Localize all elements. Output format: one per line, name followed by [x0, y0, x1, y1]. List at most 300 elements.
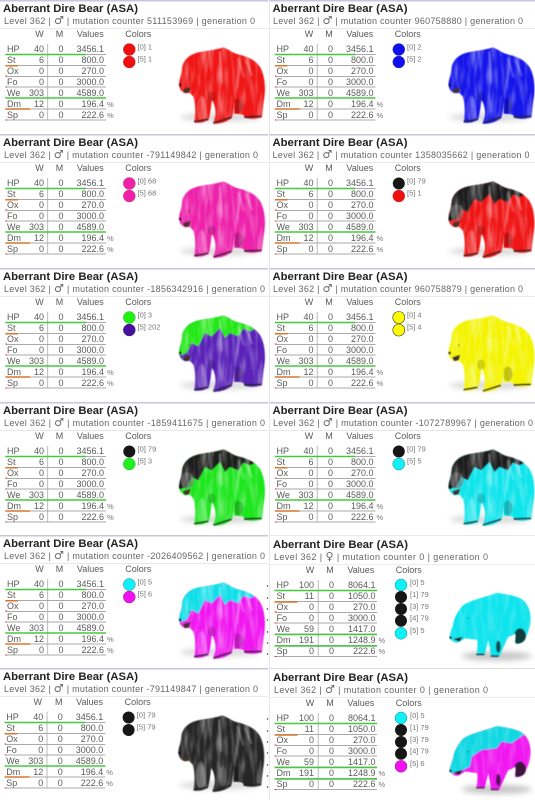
- stats table: M: [325, 29, 333, 39]
- stats table: We: [276, 757, 290, 767]
- stats table: W: [305, 297, 314, 307]
- stats table: %: [106, 779, 113, 788]
- stats table: 270.0: [351, 200, 374, 210]
- stats table: 191: [299, 768, 314, 778]
- icon: red bear: [170, 40, 270, 127]
- stats table: We: [276, 490, 290, 500]
- stats table: 800.0: [81, 590, 104, 600]
- colour swatches: [3] 79: [410, 602, 429, 611]
- stats table: Sp: [7, 110, 18, 120]
- stats table: 3456.1: [346, 44, 374, 54]
- stats table: 196.4: [81, 233, 104, 243]
- title: Aberrant Dire Bear (ASA): [3, 538, 138, 550]
- stats table: 0: [39, 345, 44, 355]
- stats table: Colors: [395, 431, 421, 441]
- stats table: M: [325, 163, 333, 173]
- stats table: 0: [328, 178, 333, 188]
- icon: green and purple bear: [178, 314, 266, 393]
- stats table: 0: [58, 579, 64, 589]
- stats table: 4589.0: [76, 756, 103, 766]
- stats table: 0: [39, 334, 44, 344]
- colour swatches: [5] 202: [138, 322, 160, 332]
- stats table: 0: [328, 323, 333, 333]
- colour swatches: [395, 578, 429, 639]
- icon: cyan small bear: [440, 587, 535, 661]
- stats table: 12: [34, 233, 44, 243]
- stats table: 6: [308, 55, 314, 65]
- stats table: Colors: [395, 163, 421, 173]
- subtitle: Level 362 | ♂ | mutation counter -1859411675 | generation 0: [4, 416, 265, 429]
- stats table: 0: [58, 312, 64, 322]
- stats table: 8064.1: [348, 580, 376, 590]
- stats table: 303: [29, 222, 44, 232]
- stats table: 0: [329, 746, 334, 756]
- stats table: 303: [298, 356, 314, 366]
- stats table: 0: [58, 745, 63, 755]
- stats table: M: [326, 565, 334, 575]
- panel: black bear: [0, 668, 269, 795]
- stats table: 3456.1: [76, 446, 104, 456]
- subtitle: Level 362 | ♀ | mutation counter 0 | generation 0: [274, 550, 488, 563]
- stats table: HP: [276, 713, 289, 723]
- stats table: 0: [39, 110, 44, 120]
- stats table: 3456.1: [346, 312, 374, 322]
- stats table: 800.0: [81, 323, 104, 333]
- stats table: 0: [58, 323, 64, 333]
- stats table: St: [6, 723, 15, 733]
- subtitle: Level 362 | ♂ | mutation counter -1072789967 | generation 0: [273, 416, 533, 429]
- icon: black and cyan bear: [448, 448, 535, 527]
- stats table: 196.4: [351, 99, 374, 109]
- stats table: 0: [328, 244, 333, 254]
- stats table: 222.6: [81, 645, 104, 655]
- stats table: %: [107, 379, 114, 388]
- stats table: 222.6: [81, 512, 104, 522]
- subtitle: Level 362 | ♂ | mutation counter 960758879 | generation 0: [273, 282, 523, 295]
- stats table: 3456.1: [76, 712, 103, 722]
- stats table: 0: [328, 378, 333, 388]
- stats table: 4589.0: [76, 88, 104, 98]
- panel: pink bear: [0, 134, 270, 261]
- stats table: 303: [29, 490, 44, 500]
- stats table: 0: [58, 356, 64, 366]
- stats table: 0: [309, 735, 314, 745]
- stats table: 0: [328, 334, 333, 344]
- stats table: 4589.0: [76, 623, 104, 633]
- stats table: [5, 163, 152, 254]
- stats table: 1248.9: [348, 635, 376, 645]
- stats table: 0: [58, 244, 64, 254]
- panel: blue bear: [270, 0, 535, 127]
- stats table: M: [326, 698, 334, 708]
- stats table: 40: [33, 712, 43, 722]
- colour swatches: [0] 5: [410, 578, 425, 587]
- stats table: 0: [58, 446, 64, 456]
- stats table: 40: [303, 178, 314, 188]
- stats table: 0: [58, 66, 64, 76]
- panel: yellow bear: [270, 268, 535, 395]
- stats table: 3000.0: [76, 77, 104, 87]
- stats table: 0: [328, 457, 333, 467]
- stats table: Ox: [276, 602, 289, 612]
- panel: green and purple bear: [0, 268, 270, 395]
- subtitle: Level 362 | ♂ | mutation counter 0 | generation 0: [274, 683, 488, 696]
- stats table: Sp: [7, 244, 18, 254]
- stats table: HP: [7, 579, 20, 589]
- stats table: %: [376, 513, 384, 522]
- stats table: Dm: [276, 233, 290, 243]
- colour swatches: [5] 1: [138, 54, 152, 64]
- colour swatches: [5] 6: [410, 759, 425, 768]
- stats table: Dm: [7, 501, 21, 511]
- stats table: 0: [329, 768, 334, 778]
- stats table: 3456.1: [76, 312, 104, 322]
- colour swatches: [0] 79: [407, 444, 426, 454]
- stats table: 222.6: [351, 378, 374, 388]
- stats table: 40: [34, 579, 44, 589]
- stats table: 0: [39, 645, 44, 655]
- stats table: Ox: [7, 200, 19, 210]
- stats table: 222.6: [81, 244, 104, 254]
- colour swatches: [3] 79: [410, 735, 429, 744]
- stats table: [268, 565, 422, 656]
- stats table: 196.4: [81, 634, 104, 644]
- stats table: Dm: [7, 634, 21, 644]
- stats table: 270.0: [81, 734, 103, 744]
- stats table: 303: [29, 356, 44, 366]
- title: Aberrant Dire Bear (ASA): [272, 271, 408, 283]
- stats table: 0: [308, 211, 314, 221]
- colour swatches: [1] 79: [410, 723, 429, 732]
- stats table: 0: [328, 479, 333, 489]
- panel: red bear: [0, 0, 270, 127]
- stats table: 3000.0: [76, 211, 104, 221]
- stats table: Fo: [6, 745, 17, 755]
- stats table: %: [107, 234, 114, 243]
- stats table: W: [306, 698, 315, 708]
- stats table: 0: [328, 490, 333, 500]
- stats table: M: [56, 29, 63, 39]
- stats table: 0: [328, 110, 333, 120]
- icon: black and green bear: [178, 448, 266, 527]
- stats table: Fo: [276, 211, 287, 221]
- stats table: 0: [58, 590, 64, 600]
- stats table: Fo: [7, 612, 18, 622]
- stats table: 4589.0: [346, 88, 374, 98]
- stats table: Sp: [6, 778, 17, 788]
- stats table: 196.4: [81, 367, 104, 377]
- stats table: 800.0: [351, 189, 374, 199]
- stats table: 3456.1: [76, 579, 104, 589]
- stats table: 303: [29, 88, 44, 98]
- stats table: [5, 29, 152, 120]
- stats table: 196.4: [351, 367, 374, 377]
- stats table: We: [276, 356, 290, 366]
- stats table: Ox: [6, 734, 18, 744]
- stats table: 6: [39, 590, 44, 600]
- stats table: 0: [329, 735, 334, 745]
- stats table: 3456.1: [346, 178, 374, 188]
- stats table: 0: [58, 88, 64, 98]
- stats table: HP: [276, 178, 289, 188]
- stats table: St: [276, 189, 286, 199]
- stats table: 0: [309, 646, 314, 656]
- stats table: 0: [309, 602, 314, 612]
- stats table: 0: [328, 356, 333, 366]
- colour swatches: [393, 42, 422, 68]
- stats table: 0: [58, 44, 64, 54]
- stats table: 270.0: [81, 468, 104, 478]
- stats table: HP: [276, 44, 289, 54]
- stats table: 222.6: [81, 778, 103, 788]
- colour swatches: [0] 68: [138, 176, 156, 186]
- stats table: 3000.0: [346, 211, 374, 221]
- stats table: 196.4: [81, 501, 104, 511]
- stats table: W: [35, 564, 44, 574]
- stats table: 0: [39, 479, 44, 489]
- colour swatches: [0] 79: [137, 710, 156, 720]
- stats table: %: [378, 780, 386, 789]
- stats table: M: [325, 297, 333, 307]
- stats table: 0: [329, 613, 334, 623]
- colour swatches: [5] 5: [407, 456, 422, 466]
- stats table: 0: [58, 233, 64, 243]
- stats table: Ox: [276, 66, 289, 76]
- stats table: 12: [34, 367, 44, 377]
- stats table: Dm: [276, 501, 290, 511]
- stats table: 303: [29, 623, 44, 633]
- stats table: 3000.0: [348, 746, 376, 756]
- title: Aberrant Dire Bear (ASA): [3, 405, 138, 417]
- colour swatches: [123, 578, 152, 603]
- stats table: 40: [34, 446, 44, 456]
- colour swatches: [5] 4: [407, 322, 422, 332]
- stats table: 3000.0: [76, 745, 103, 755]
- stats table: M: [56, 163, 63, 173]
- stats table: 0: [58, 634, 64, 644]
- stats table: 3000.0: [346, 77, 374, 87]
- stats table: 800.0: [81, 723, 103, 733]
- stats table: 11: [305, 591, 314, 601]
- stats table: Ox: [7, 66, 19, 76]
- colour swatches: [0] 79: [138, 444, 156, 454]
- stats table: 6: [39, 457, 44, 467]
- stats table: 800.0: [81, 55, 104, 65]
- stats table: 0: [39, 378, 44, 388]
- stats table: 270.0: [81, 334, 104, 344]
- stats table: 800.0: [81, 189, 104, 199]
- stats table: St: [7, 590, 16, 600]
- stats table: Fo: [276, 479, 287, 489]
- colour swatches: [123, 444, 156, 470]
- stats table: 0: [308, 334, 314, 344]
- stats table: Fo: [7, 345, 18, 355]
- stats table: %: [107, 368, 114, 377]
- stats table: W: [35, 431, 44, 441]
- subtitle: Level 362 | ♂ | mutation counter -2026409562 | generation 0: [4, 549, 265, 562]
- colour swatches: [1] 79: [410, 590, 429, 599]
- stats table: 0: [308, 244, 314, 254]
- stats table: Colors: [396, 698, 422, 708]
- stats table: Fo: [276, 345, 287, 355]
- stats table: Values: [346, 29, 374, 39]
- colour swatches: [0] 4: [407, 310, 422, 320]
- stats table: Ox: [276, 334, 289, 344]
- stats table: %: [378, 647, 386, 656]
- colour swatches: [123, 310, 160, 336]
- colour swatches: [5] 6: [138, 590, 152, 598]
- stats table: Colors: [395, 29, 421, 39]
- stats table: HP: [6, 712, 19, 722]
- stats table: 3000.0: [76, 345, 104, 355]
- stats table: Sp: [276, 378, 288, 388]
- stats table: 40: [34, 312, 44, 322]
- stats table: M: [56, 297, 63, 307]
- stats table: HP: [276, 580, 289, 590]
- stats table: 0: [58, 99, 64, 109]
- stats table: 0: [328, 44, 333, 54]
- title: Aberrant Dire Bear (ASA): [273, 672, 408, 684]
- stats table: 0: [328, 55, 333, 65]
- colour swatches: [0] 1: [138, 42, 152, 52]
- colour swatches: [4] 79: [410, 614, 429, 622]
- title: Aberrant Dire Bear (ASA): [273, 539, 408, 551]
- stats table: 0: [329, 635, 334, 645]
- stats table: Dm: [276, 367, 290, 377]
- subtitle: Level 362 | ♂ | mutation counter 511153969 | generation 0: [4, 14, 255, 27]
- stats table: 0: [38, 745, 43, 755]
- stats table: 0: [39, 244, 44, 254]
- colour swatches: [5] 2: [407, 54, 422, 64]
- stats table: 303: [28, 756, 43, 766]
- stats table: 0: [58, 200, 64, 210]
- stats table: 0: [308, 512, 314, 522]
- stats table: 0: [329, 591, 334, 601]
- stats table: Dm: [7, 99, 21, 109]
- stats table: 0: [58, 334, 64, 344]
- colour swatches: [395, 711, 429, 772]
- stats table: 6: [308, 189, 314, 199]
- stats table: 0: [328, 367, 333, 377]
- stats table: We: [276, 222, 290, 232]
- stats table: 0: [328, 512, 333, 522]
- panel: black and green bear: [0, 402, 270, 529]
- stats table: [275, 29, 421, 120]
- stats table: [275, 297, 421, 388]
- stats table: 3456.1: [346, 446, 374, 456]
- stats table: M: [325, 431, 333, 441]
- icon: yellow bear: [440, 308, 535, 395]
- stats table: We: [276, 624, 290, 634]
- stats table: 0: [328, 189, 333, 199]
- colour swatches: [393, 176, 426, 202]
- stats table: 0: [58, 712, 63, 722]
- stats table: 4589.0: [76, 490, 104, 500]
- stats table: %: [376, 379, 384, 388]
- stats table: %: [107, 646, 114, 655]
- stats table: M: [56, 431, 63, 441]
- stats table: %: [107, 513, 114, 522]
- stats table: 0: [328, 345, 333, 355]
- stats table: 59: [304, 624, 314, 634]
- stats table: 0: [329, 624, 334, 634]
- stats table: %: [378, 769, 386, 778]
- stats table: 0: [58, 222, 64, 232]
- stats table: 0: [328, 66, 333, 76]
- stats table: 0: [308, 200, 314, 210]
- stats table: Colors: [125, 697, 151, 707]
- stats table: St: [276, 724, 286, 734]
- stats table: 1050.0: [348, 724, 376, 734]
- stats table: 0: [38, 734, 43, 744]
- stats table: [5, 564, 152, 655]
- stats table: 0: [58, 723, 63, 733]
- stats table: 100: [299, 713, 314, 723]
- stats table: 0: [328, 312, 333, 322]
- stats table: Sp: [7, 512, 18, 522]
- stats table: M: [55, 697, 63, 707]
- stats table: 196.4: [81, 99, 104, 109]
- stats table: 12: [303, 367, 314, 377]
- stats table: 222.6: [81, 378, 104, 388]
- stats table: 4589.0: [346, 222, 374, 232]
- stats table: 0: [308, 345, 314, 355]
- stats table: [275, 163, 421, 254]
- icon: black and red bear: [448, 180, 535, 259]
- stats table: 6: [308, 457, 314, 467]
- stats table: Sp: [276, 646, 288, 656]
- stats table: Values: [346, 297, 374, 307]
- stats table: 100: [299, 580, 314, 590]
- stats table: HP: [7, 446, 20, 456]
- colour swatches: [393, 310, 422, 336]
- stats table: 0: [38, 778, 43, 788]
- stats table: W: [35, 29, 44, 39]
- stats table: %: [107, 635, 114, 644]
- stats table: Fo: [276, 77, 287, 87]
- stats table: 800.0: [351, 55, 374, 65]
- stats table: 1417.0: [348, 624, 376, 634]
- stats table: Colors: [125, 297, 152, 307]
- stats table: 0: [309, 613, 314, 623]
- stats table: 0: [328, 468, 333, 478]
- stats table: %: [107, 111, 114, 120]
- stats table: Values: [347, 698, 375, 708]
- stats table: [5, 431, 152, 522]
- stats table: HP: [276, 312, 289, 322]
- stats table: 1050.0: [348, 591, 376, 601]
- colour swatches: [123, 42, 152, 68]
- stats table: 0: [329, 757, 334, 767]
- stats table: 6: [38, 723, 43, 733]
- stats table: 40: [303, 312, 314, 322]
- stats table: 4589.0: [346, 490, 374, 500]
- stats table: We: [276, 88, 290, 98]
- stats table: We: [7, 222, 20, 232]
- stats table: 0: [58, 178, 64, 188]
- stats table: Sp: [276, 110, 288, 120]
- stats table: Sp: [276, 779, 288, 789]
- stats table: [5, 697, 151, 788]
- title: Aberrant Dire Bear (ASA): [272, 405, 408, 417]
- stats table: 270.0: [351, 66, 374, 76]
- stats table: HP: [7, 44, 20, 54]
- stats table: 0: [308, 468, 314, 478]
- stats table: 6: [308, 323, 314, 333]
- stats table: 4589.0: [76, 356, 104, 366]
- stats table: %: [376, 368, 384, 377]
- stats table: %: [376, 234, 384, 243]
